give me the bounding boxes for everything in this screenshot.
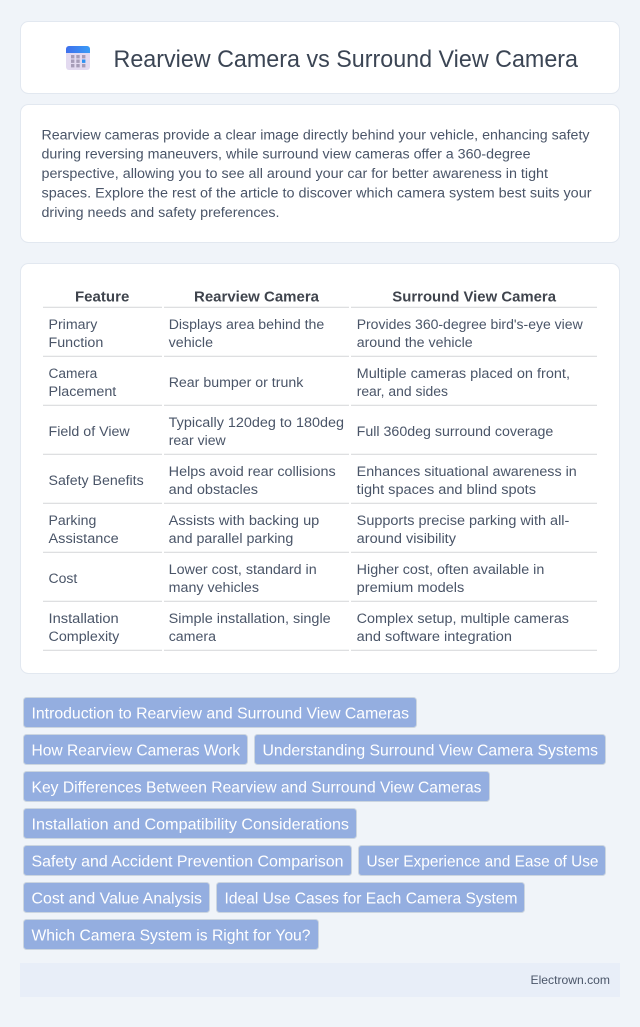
table row: cost: Lower cost, standard in (169, 562, 317, 578)
table row: camera placement (43, 366, 597, 406)
tag: introduction: Introduction to Rearview and Surround View Cameras (32, 705, 409, 722)
table header row (43, 290, 597, 308)
table row: cost (43, 562, 597, 602)
table row: field of view: Full 360deg surround coverage (357, 424, 553, 440)
table row: primary function: Primary (48, 317, 98, 333)
table row: primary function (43, 317, 597, 357)
table row: field of view: Typically 120deg to 180deg (169, 415, 344, 431)
table row: camera placement: Placement (48, 384, 116, 400)
table row: camera placement: rear, and sides (357, 384, 448, 400)
tag: installation: Installation and Compatibility Considerations (32, 816, 349, 833)
tag: which camera (24, 920, 318, 950)
text block: introduction paragraph: perspective, allowing you to see all around your car for better awareness in tight (42, 166, 548, 182)
footer (20, 963, 620, 997)
tag: ideal use cases (216, 882, 524, 912)
panel: comparison table (20, 264, 620, 674)
panel: article section tags (23, 697, 606, 950)
table row: safety benefits: tight spaces and blind spots (357, 482, 536, 498)
tag: introduction (24, 698, 416, 728)
tag: ideal use cases: Ideal Use Cases for Each Camera System (224, 890, 518, 907)
table header row: Rearview Camera (194, 290, 320, 306)
table row: safety benefits: and obstacles (169, 482, 258, 498)
table row: installation complexity: and software integration (357, 629, 512, 645)
tag: safety: Safety and Accident Prevention Comparison (32, 853, 344, 870)
tag: key differences (24, 772, 490, 802)
text block: introduction paragraph: driving needs and safety preferences. (42, 205, 280, 221)
table row: field of view: rear view (169, 433, 226, 449)
table row: safety benefits: Safety Benefits (48, 473, 144, 489)
table row: parking assistance: Supports precise parking with all- (357, 513, 570, 529)
table row: primary function: vehicle (169, 335, 213, 351)
table row: camera placement: Camera (48, 366, 97, 382)
footer: Electrown.com (530, 973, 610, 987)
table row: parking assistance: Parking (48, 513, 96, 529)
tag: how rearview cameras work: How Rearview Cameras Work (32, 742, 241, 759)
table row: primary function: Function (48, 335, 103, 351)
table row: parking assistance: Assists with backing up (169, 513, 319, 529)
table row: safety benefits: Enhances situational awareness in (357, 464, 577, 480)
panel: introduction (20, 104, 620, 242)
table row: cost: premium models (357, 580, 464, 596)
table row: primary function: Provides 360-degree bird's-eye view (357, 317, 583, 333)
table row: installation complexity: Complexity (48, 629, 120, 645)
text block: introduction paragraph: Rearview cameras provide a clear image directly behind your vehicle, enhancing safety (42, 128, 590, 144)
table row: installation complexity: Installation (48, 611, 119, 627)
table row: primary function: around the vehicle (357, 335, 473, 351)
tag: understanding surround view (254, 734, 606, 764)
table header row: Feature (75, 290, 129, 306)
table row: cost: many vehicles (169, 580, 259, 596)
table row: parking assistance: around visibility (357, 531, 457, 547)
tag: key differences: Key Differences Between Rearview and Surround View Cameras (32, 779, 482, 796)
text block: introduction paragraph (42, 128, 592, 221)
table row: installation complexity: Simple installation, single (169, 611, 331, 627)
panel: header (20, 22, 620, 94)
text block: introduction paragraph: spaces. Explore the rest of the article to discover which camera system best suits your (42, 186, 592, 202)
tag: user experience: User Experience and Ease of Use (366, 853, 599, 870)
table row: field of view: Field of View (48, 424, 130, 440)
tag: how rearview cameras work (24, 734, 248, 764)
tag: installation (24, 808, 356, 838)
table row: cost: Higher cost, often available in (357, 562, 544, 578)
tag: user experience (358, 846, 606, 876)
table row: camera placement: Multiple cameras placed on front, (357, 366, 570, 382)
table row: cost: Cost (48, 571, 77, 587)
tag: which camera: Which Camera System is Right for You? (32, 927, 311, 944)
tag: cost and value (24, 882, 210, 912)
table row: safety benefits (43, 464, 597, 504)
table row: parking assistance (43, 513, 597, 553)
table row: primary function: Displays area behind the (169, 317, 324, 333)
table row: camera placement: Rear bumper or trunk (169, 375, 304, 391)
tag: understanding surround view: Understanding Surround View Camera Systems (262, 742, 598, 759)
tag: cost and value: Cost and Value Analysis (32, 890, 202, 907)
table row: installation complexity: Complex setup, multiple cameras (357, 611, 569, 627)
table row: installation complexity: camera (169, 629, 216, 645)
title: Rearview Camera vs Surround View Camera (114, 46, 579, 73)
tag: safety (24, 846, 352, 876)
table header row: Surround View Camera (392, 290, 557, 306)
text block: introduction paragraph: during reversing maneuvers, while surround view cameras offer a 360-degree (42, 147, 531, 163)
table row: field of view (43, 415, 597, 455)
table row: parking assistance: and parallel parking (169, 531, 293, 547)
table row: safety benefits: Helps avoid rear collisions (169, 464, 336, 480)
table row: parking assistance: Assistance (48, 531, 119, 547)
icon: calendar grid (66, 46, 90, 70)
table row: installation complexity (43, 611, 597, 651)
